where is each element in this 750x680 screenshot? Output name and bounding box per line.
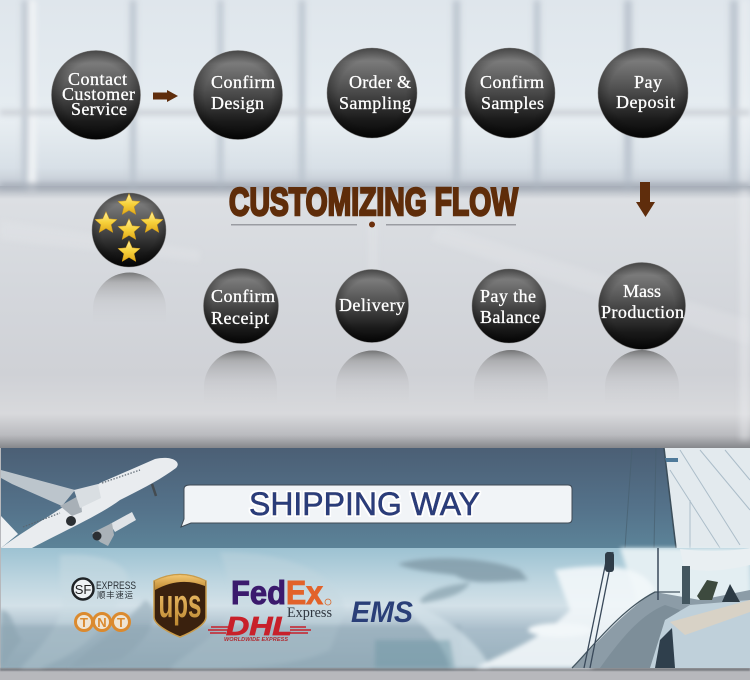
- step: Mass Production: [598, 262, 686, 350]
- airplane: [1, 458, 178, 548]
- logo: FedEx Express: [231, 574, 332, 621]
- step: Order & Sampling: [327, 48, 417, 138]
- step: Contact Customer Service: Contact: [68, 69, 127, 89]
- step: Pay Deposit: Pay: [634, 72, 662, 92]
- step: Confirm Design: Confirm: [211, 72, 275, 92]
- step: Pay the Balance: Balance: [480, 307, 540, 327]
- step: five star rating: [92, 193, 166, 267]
- step: Contact Customer Service: Customer: [62, 84, 135, 104]
- step: Confirm Samples: [465, 48, 555, 138]
- step: Mass Production: Production: [601, 302, 684, 322]
- step: Pay Deposit: Deposit: [616, 92, 675, 112]
- logo: TNT: T: [80, 615, 88, 630]
- step: Confirm Receipt: [204, 268, 278, 344]
- logo: TNT: [76, 614, 130, 630]
- logo: DHL: [208, 611, 311, 643]
- logo: UPS shield: [154, 574, 206, 637]
- logo: FedEx Express: Fed: [231, 574, 286, 611]
- logo: FedEx Express: Ex: [286, 574, 324, 611]
- yacht: [572, 548, 750, 668]
- step: Confirm Design: [194, 50, 282, 140]
- logo: TNT: N: [97, 615, 107, 630]
- logo: FedEx Express: Express: [287, 605, 332, 621]
- step: Delivery: [336, 270, 408, 342]
- world map silhouette: [1, 552, 528, 668]
- step: Confirm Design: Design: [211, 93, 264, 113]
- reflection: stars: [93, 273, 166, 322]
- title: Customizing Flow: [229, 181, 518, 228]
- step: Contact Customer Service: [52, 50, 140, 140]
- step: Pay Deposit: [598, 48, 688, 138]
- reflection: Mass Production: [605, 350, 679, 403]
- arrow: down: [636, 182, 655, 217]
- step: Mass Production: Mass: [623, 281, 661, 301]
- step: Confirm Samples: Samples: [481, 93, 544, 113]
- background: blurred airport hall: [0, 0, 750, 448]
- logo: SF Express: EXPRESS: [96, 580, 136, 592]
- title: Customizing Flow: CUSTOMIZING FLOW: [229, 181, 518, 224]
- step: Contact Customer Service: Service: [71, 99, 127, 119]
- sea spray and backdrop: [475, 548, 750, 668]
- speech-box heading: Shipping Way: SHIPPING WAY: [249, 486, 480, 522]
- sail: [625, 448, 750, 548]
- arrow: right: [153, 90, 178, 102]
- shipping banner: [0, 448, 750, 680]
- step: Confirm Samples: Confirm: [480, 72, 544, 92]
- reflection: Pay the Balance: [474, 350, 548, 403]
- logo: EMS: EMS: [351, 596, 413, 629]
- step: Pay the Balance: [472, 269, 546, 343]
- sea bands: [1, 600, 490, 668]
- logo: UPS shield: ups: [158, 582, 202, 626]
- logo: SF Express: 顺丰速运: [97, 590, 133, 600]
- logo: DHL: WORLDWIDE EXPRESS: [224, 637, 288, 643]
- logo: SF Express: [72, 578, 136, 600]
- step: Pay the Balance: Pay the: [480, 286, 536, 306]
- speech-box heading: Shipping Way: [181, 485, 572, 527]
- reflection: Delivery: [336, 350, 409, 403]
- step: Delivery: Delivery: [339, 295, 405, 315]
- logo: TNT: T: [117, 615, 125, 630]
- reflection: Confirm Receipt: [204, 350, 277, 403]
- logo: SF Express: SF: [75, 582, 91, 597]
- step: Order & Sampling: Sampling: [339, 93, 411, 113]
- step: Confirm Receipt: Receipt: [211, 308, 269, 328]
- logo: DHL: DHL: [226, 611, 292, 641]
- step: Order & Sampling: Order &: [349, 72, 411, 92]
- step: Confirm Receipt: Confirm: [211, 286, 275, 306]
